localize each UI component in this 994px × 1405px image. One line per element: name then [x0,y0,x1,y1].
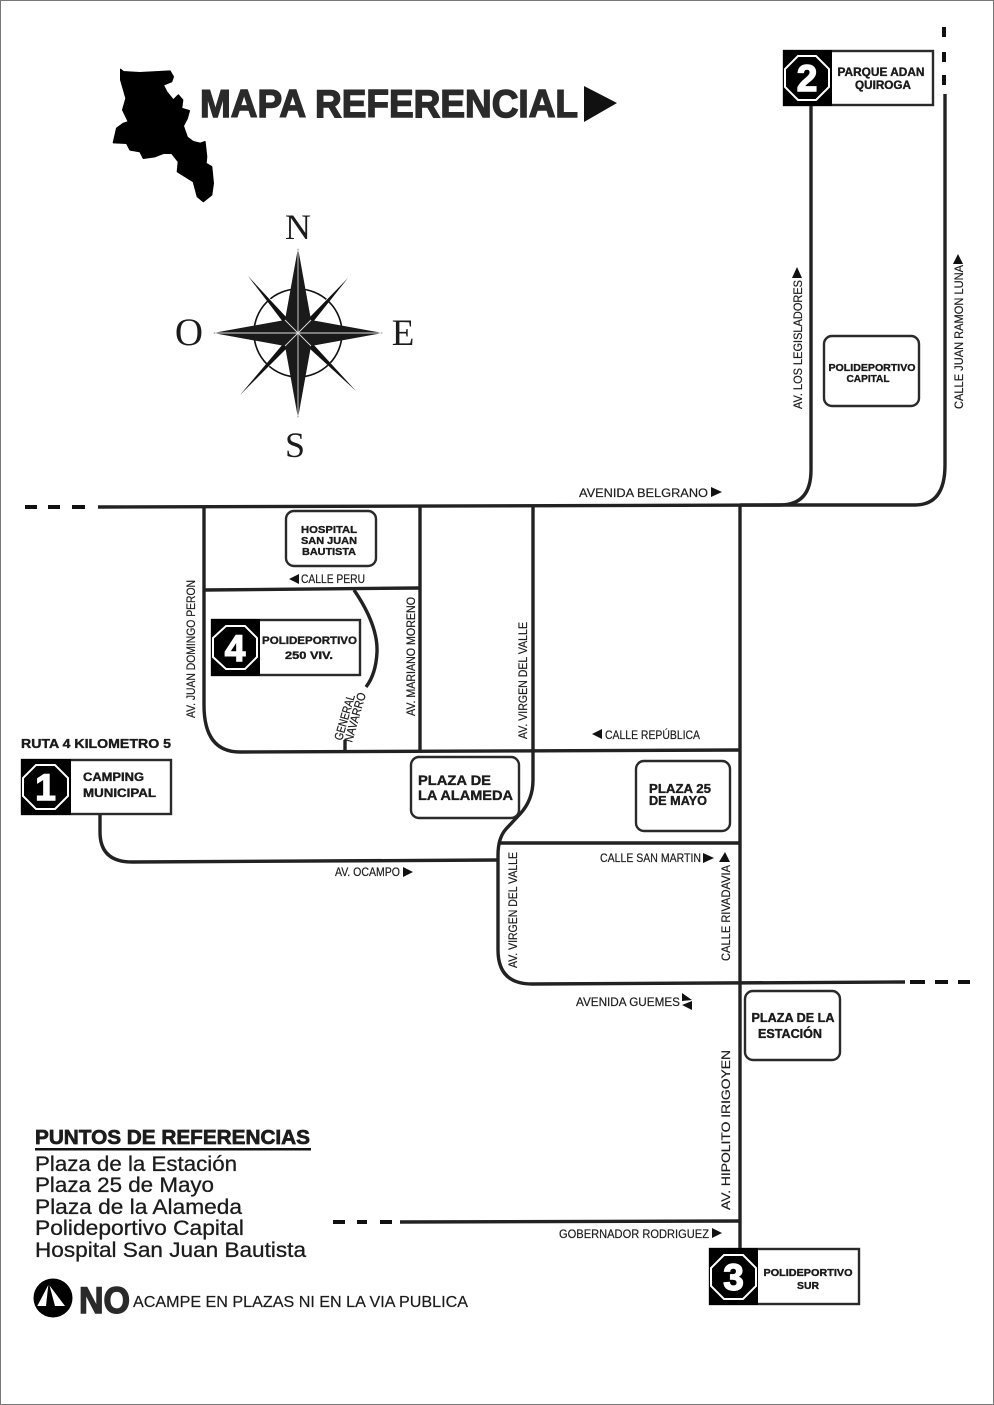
marker 3: Polideportivo Sur: 3 [723,1257,744,1298]
marker 4: Polideportivo 250 Viv. [211,619,360,676]
marker 1: Camping Municipal [21,759,171,815]
place: Plaza 25 de Mayo: PLAZA 25 [649,781,711,796]
marker 4: Polideportivo 250 Viv.: POLIDEPORTIVO [262,635,357,647]
compass letter N: N [285,207,311,247]
label: Ruta 4 Kilometro 5: RUTA 4 KILOMETRO 5 [21,737,171,751]
label: Calle Peru: CALLE PERU [301,572,365,586]
label: Calle Juan Ramon Luna: CALLE JUAN RAMON LUNA [952,265,966,409]
place: Polideportivo Capital: POLIDEPORTIVO [828,362,916,374]
marker 3: Polideportivo Sur: SUR [797,1280,819,1292]
place: Plaza de la Estacion: ESTACIÓN [758,1026,822,1041]
place: Plaza 25 de Mayo: DE MAYO [649,793,707,808]
marker 3: Polideportivo Sur [709,1248,859,1305]
NO text: NO [79,1280,130,1321]
place: Plaza 25 de Mayo [636,761,730,831]
place: Polideportivo Capital [824,336,919,406]
compass rose [175,207,414,465]
marker 1: Camping Municipal: 1 [35,767,56,808]
marker 2: Parque Adan Quiroga: 2 [797,58,817,99]
marker 2: Parque Adan Quiroga [783,50,933,106]
place: Plaza de la Alameda [411,757,519,818]
label: Av. Ocampo: AV. OCAMPO [335,865,400,879]
marker 2: Parque Adan Quiroga: PARQUE ADAN [838,67,924,79]
title: MAPA REFERENCIAL [200,83,578,126]
place: Hospital San Juan Bautista [286,511,376,566]
label: Av. Los Legisladores: AV. LOS LEGISLADORES [791,280,805,409]
icon: tent [34,1278,72,1318]
label: General Navarro: GENERAL [331,693,358,742]
notice text: ACAMPE EN PLAZAS NI EN LA VIA PUBLICA [133,1294,468,1311]
legend list: Hospital San Juan Bautista [35,1239,306,1262]
legend list: Polideportivo Capital [35,1217,244,1240]
legend heading: PUNTOS DE REFERENCIAS [35,1127,310,1149]
place: Plaza de la Estacion: PLAZA DE LA [752,1011,834,1025]
compass letter E: E [392,313,414,354]
legend list: Plaza de la Alameda [35,1196,242,1219]
label: Avenida Guemes: AVENIDA GUEMES [576,995,680,1009]
label: Calle Republica: CALLE REPÚBLICA [605,727,700,742]
marker 2: Parque Adan Quiroga: QUIROGA [855,80,911,92]
compass letter S: S [285,425,305,465]
place: Plaza de la Estacion [745,991,840,1060]
label: Calle Rivadavia: CALLE RIVADAVIA [719,865,733,961]
label: Av. Hipolito Irigoyen: AV. HIPOLITO IRIGOYEN [719,1050,733,1210]
marker 4: Polideportivo 250 Viv.: 4 [225,628,246,669]
legend list: Plaza 25 de Mayo [35,1174,214,1197]
marker 3: Polideportivo Sur: POLIDEPORTIVO [764,1267,852,1279]
compass letter O: O [175,311,203,354]
legend list: Plaza de la Estación [35,1153,237,1176]
place: Hospital San Juan Bautista: HOSPITAL [301,524,358,536]
label: Avenida Belgrano: AVENIDA BELGRANO [579,486,708,500]
place: Hospital San Juan Bautista: BAUTISTA [302,546,356,558]
marker 1: Camping Municipal: CAMPING [83,770,144,784]
marker 1: Camping Municipal: MUNICIPAL [83,786,156,800]
notice: no camping [34,1278,468,1321]
label: General Navarro: NAVARRO [341,691,369,744]
place: Polideportivo Capital: CAPITAL [846,373,890,385]
label: Av. Virgen del Valle north: AV. VIRGEN DEL VALLE [516,622,530,739]
place: Plaza de la Alameda: LA ALAMEDA [418,787,513,803]
place: Hospital San Juan Bautista: SAN JUAN [301,535,357,547]
icon: Catamarca province silhouette [113,69,213,202]
legend list [35,1153,306,1262]
place: Plaza de la Alameda: PLAZA DE [418,772,491,788]
label: Av. Virgen del Valle south: AV. VIRGEN DEL VALLE [506,852,520,968]
label: Av. Juan Domingo Peron: AV. JUAN DOMINGO PERON [184,580,198,718]
label: Av. Mariano Moreno: AV. MARIANO MORENO [404,597,418,716]
legend: puntos de referencias [35,1127,311,1262]
label: General Navarro [331,691,369,744]
street labels [184,254,966,1241]
label: Calle San Martin: CALLE SAN MARTIN [600,851,701,865]
label: Gobernador Rodriguez: GOBERNADOR RODRIGUEZ [559,1227,709,1241]
marker 4: Polideportivo 250 Viv.: 250 VIV. [285,650,333,662]
